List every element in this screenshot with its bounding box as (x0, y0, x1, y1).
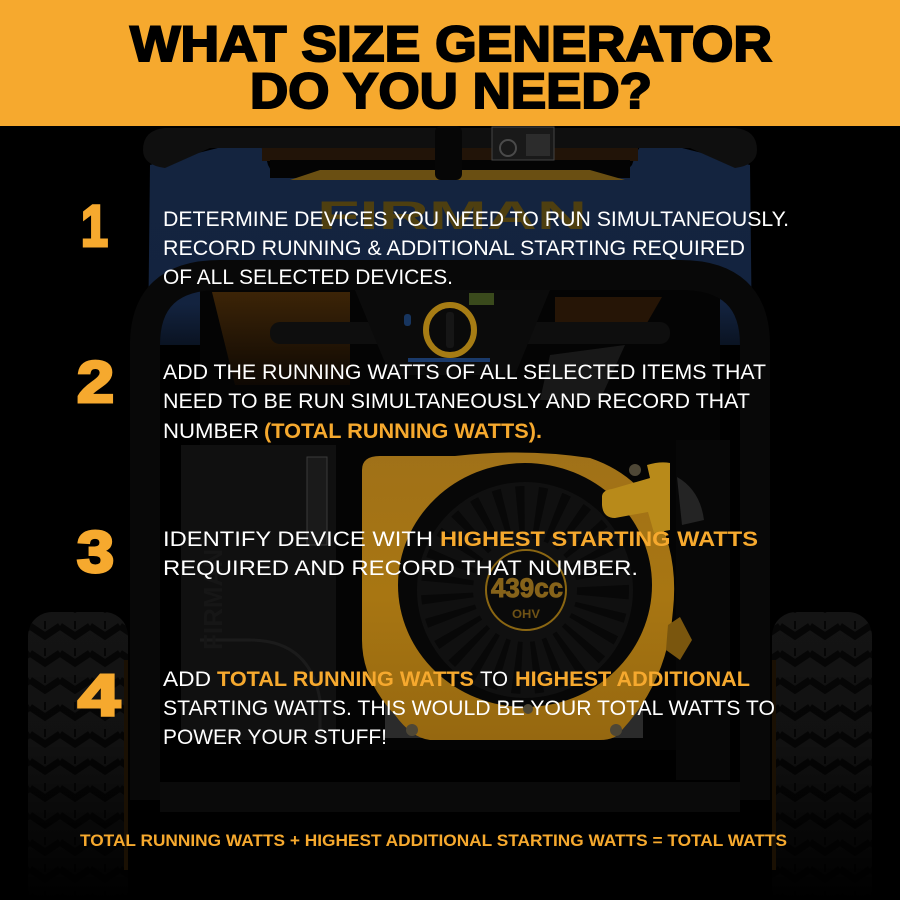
step 2 text (163, 361, 766, 443)
tank cap strip (290, 170, 625, 180)
fan cover (398, 463, 652, 707)
step 2 text: NEED TO BE RUN SIMULTANEOUSLY AND RECORD THAT (163, 390, 750, 413)
step 2 text: NUMBER (163, 420, 259, 443)
right engine parts (676, 440, 730, 780)
step 1 (81, 194, 789, 289)
number 3: 3 (77, 520, 114, 585)
step 1 text (163, 208, 789, 289)
step 1 text: OF ALL SELECTED DEVICES. (163, 266, 453, 289)
title banner (0, 0, 900, 126)
orange tab (666, 617, 692, 660)
fuel labels (404, 314, 411, 326)
left wheel (28, 612, 128, 900)
silver pulley (677, 477, 704, 525)
orange interior (212, 292, 350, 385)
step 2 (77, 350, 766, 443)
step 1 text: DETERMINE DEVICES YOU NEED TO RUN SIMULTANEOUSLY. (163, 208, 789, 231)
step 3 (77, 520, 758, 585)
panel strip (408, 358, 490, 362)
top handle (143, 128, 757, 168)
step 4 text: ADD (163, 668, 211, 691)
step 2 text: (TOTAL RUNNING WATTS). (264, 420, 542, 443)
silver bracket (540, 345, 625, 400)
number 1: 1 (81, 194, 108, 259)
housing bolts (406, 464, 641, 736)
step 4 text: TOTAL RUNNING WATTS (217, 668, 474, 691)
step 3 text: HIGHEST STARTING WATTS (440, 528, 758, 551)
engine size badge (486, 550, 566, 630)
alternator box (181, 445, 336, 740)
formula footer: TOTAL RUNNING WATTS + HIGHEST ADDITIONAL STARTING WATTS = TOTAL WATTS (80, 831, 787, 850)
step 3 text (163, 528, 758, 580)
vertical brand: FIRMAN (198, 549, 228, 650)
engine bay (200, 290, 720, 750)
starter handle (602, 462, 670, 533)
blue tank (148, 140, 752, 345)
black slot (270, 160, 630, 178)
number 2: 2 (77, 350, 114, 415)
step 4 text: HIGHEST ADDITIONAL (515, 668, 750, 691)
bottom frame (160, 782, 740, 812)
step 4 text: TO (480, 668, 508, 691)
title line 2: DO YOU NEED? (250, 63, 652, 119)
step 4 text: STARTING WATTS. THIS WOULD BE YOUR TOTAL WATTS TO (163, 697, 775, 720)
OHV: OHV (512, 607, 540, 621)
step 4 text: POWER YOUR STUFF! (163, 726, 387, 749)
step 4 text (163, 668, 775, 749)
brown rear stripe (262, 148, 638, 161)
handle clamp (435, 126, 462, 180)
grey engine base (385, 700, 643, 738)
right wheel (772, 612, 872, 900)
brand lettering: FIRMAN (317, 194, 587, 238)
displacement: 439cc (491, 573, 563, 603)
roll frame (145, 275, 755, 800)
warning label (492, 127, 554, 160)
yellow recoil housing (362, 452, 674, 740)
step 3 text: IDENTIFY DEVICE WITH (163, 528, 433, 551)
number 4: 4 (78, 663, 120, 728)
step 4 (78, 663, 775, 749)
fuel knob (426, 305, 474, 355)
title line 1: WHAT SIZE GENERATOR (130, 16, 772, 72)
step 2 text: ADD THE RUNNING WATTS OF ALL SELECTED ITEMS THAT (163, 361, 766, 384)
control panel (350, 278, 555, 375)
step 1 text: RECORD RUNNING & ADDITIONAL STARTING REQUIRED (163, 237, 745, 260)
step 3 text: REQUIRED AND RECORD THAT NUMBER. (163, 557, 638, 580)
knob grip (446, 312, 454, 348)
horizontal pipe (270, 322, 670, 344)
gas label (469, 293, 494, 305)
